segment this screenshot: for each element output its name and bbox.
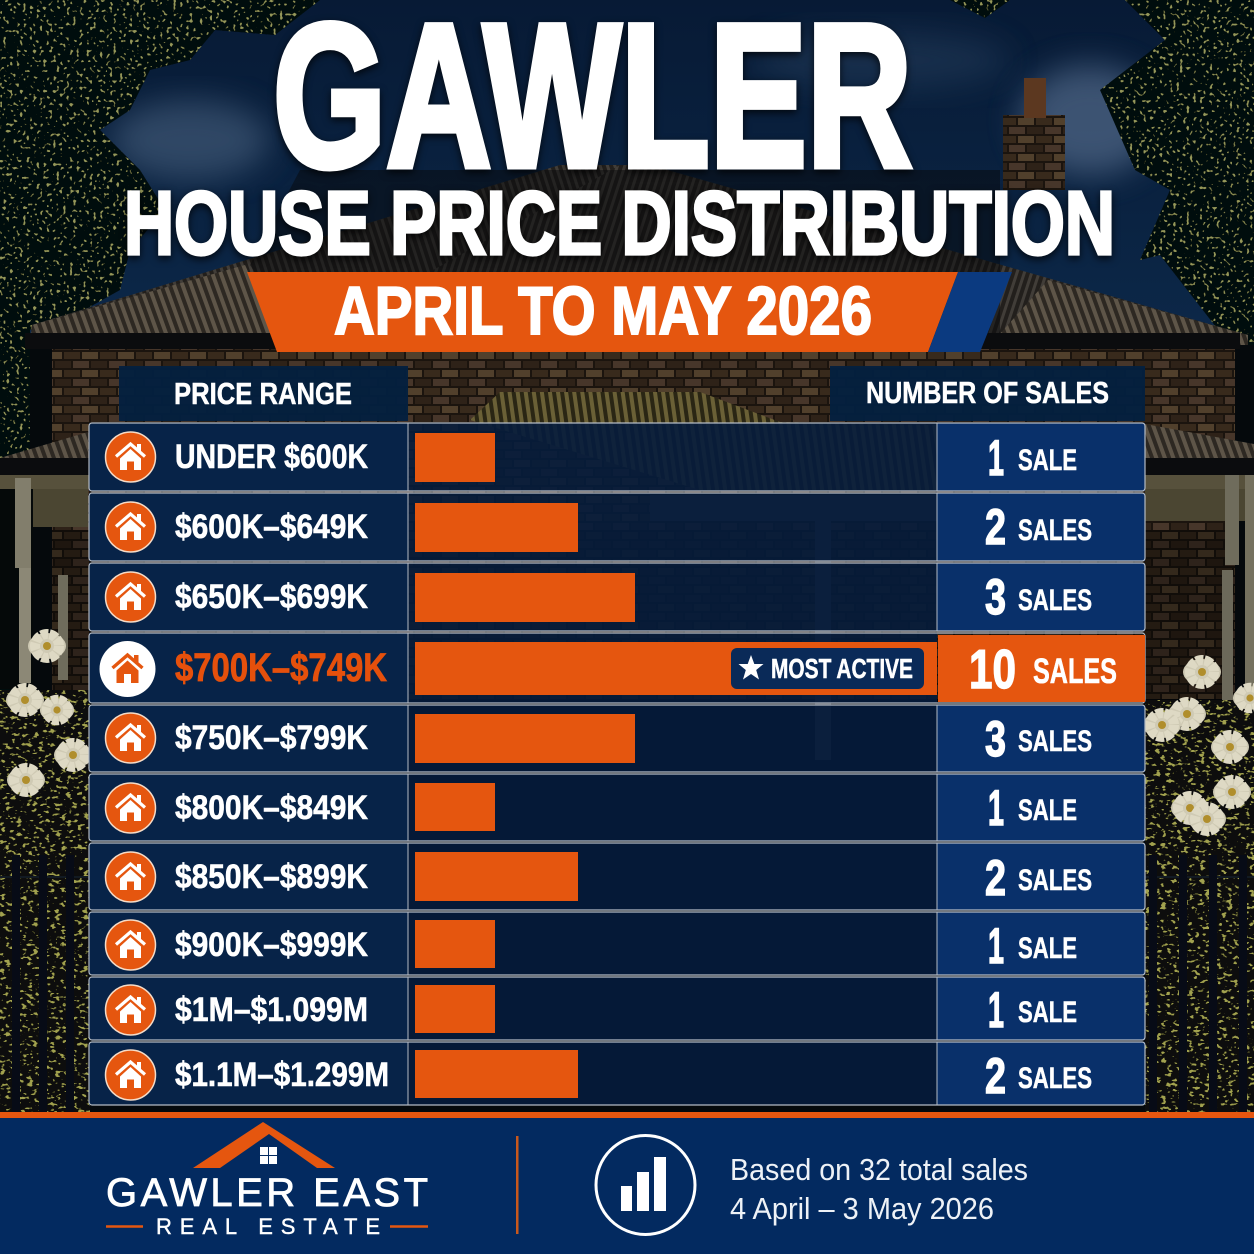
- row: under $600K: UNDER $600K: [175, 438, 368, 476]
- row: under $600K: SALE: [1018, 444, 1077, 477]
- row: $1.1M-$1.299M: 2: [985, 1048, 1006, 1104]
- row: $750K-$799K: [89, 705, 1145, 772]
- row: $600K-$649K: 2: [985, 499, 1006, 555]
- row: $900K-$999K: SALE: [1018, 932, 1077, 965]
- footer band: [0, 1112, 1254, 1254]
- row: $800K-$849K: $800K–$849K: [175, 789, 368, 827]
- row: $750K-$799K: $750K–$799K: [175, 719, 368, 757]
- footnote: total sales and date range: Based on 32 total sales: [730, 1152, 1028, 1187]
- row: $1M-$1.099M: 1: [988, 982, 1004, 1038]
- row: $1.1M-$1.299M: $1.1M–$1.299M: [175, 1056, 389, 1094]
- row: $900K-$999K: [89, 912, 1145, 975]
- garden bushes and fence: [0, 690, 1254, 1112]
- left and right trees: [0, 0, 1254, 700]
- row: $650K-$699K: $650K–$699K: [175, 578, 368, 616]
- row: under $600K: 1: [988, 430, 1004, 486]
- row: $700K-$749K most active highlight: $700K–$749K: [175, 646, 387, 690]
- row: $1M-$1.099M: [89, 977, 1145, 1040]
- row: $600K-$649K: $600K–$649K: [175, 508, 368, 546]
- column header: number of sales: [830, 366, 1145, 421]
- row: $1.1M-$1.299M: SALES: [1018, 1062, 1092, 1095]
- row: $600K-$649K: [89, 493, 1145, 561]
- row: $750K-$799K: 3: [985, 711, 1006, 767]
- row: $650K-$699K: 3: [985, 569, 1006, 625]
- row: $900K-$999K: $900K–$999K: [175, 926, 368, 964]
- row: $800K-$849K: [89, 774, 1145, 841]
- logo: Gawler East Real Estate: GAWLER EAST: [106, 1171, 428, 1215]
- row: $800K-$849K: SALE: [1018, 794, 1077, 827]
- row: $650K-$699K: [89, 563, 1145, 631]
- row: $600K-$649K: SALES: [1018, 514, 1092, 547]
- row: $850K-$899K: $850K–$899K: [175, 858, 368, 896]
- logo: Gawler East Real Estate: REAL ESTATE: [156, 1214, 380, 1239]
- row: $650K-$699K: SALES: [1018, 584, 1092, 617]
- row: $850K-$899K: [89, 843, 1145, 910]
- row: $700K-$749K most active highlight: [89, 633, 1145, 703]
- veranda roofs: [0, 424, 1254, 458]
- row: $700K-$749K most active highlight: 10: [969, 638, 1016, 700]
- icon: bar chart in circle: [596, 1136, 695, 1234]
- row: $1.1M-$1.299M: [89, 1042, 1145, 1105]
- row: $850K-$899K: SALES: [1018, 864, 1092, 897]
- column header: price range: PRICE RANGE: [174, 376, 352, 411]
- row: $700K-$749K most active highlight: SALES: [1033, 652, 1117, 691]
- logo: Gawler East Real Estate: [106, 1122, 428, 1239]
- row: $800K-$849K: 1: [988, 780, 1004, 836]
- row: $750K-$799K: SALES: [1018, 725, 1092, 758]
- most active badge: MOST ACTIVE: [771, 653, 913, 684]
- column header: number of sales: NUMBER OF SALES: [866, 375, 1109, 410]
- row: $900K-$999K: 1: [988, 918, 1004, 974]
- most active badge: [731, 648, 924, 689]
- row: $1M-$1.099M: $1M–$1.099M: [175, 991, 368, 1029]
- row: under $600K: [89, 423, 1145, 491]
- mid-table ghost veranda: [470, 392, 940, 490]
- footnote: total sales and date range: 4 April – 3 May 2026: [730, 1191, 994, 1226]
- column header: price range: [119, 366, 408, 421]
- row: $1M-$1.099M: SALE: [1018, 996, 1077, 1029]
- row: $850K-$899K: 2: [985, 850, 1006, 906]
- date banner: APRIL TO MAY 2026: [334, 273, 872, 349]
- footnote: total sales and date range: [730, 1152, 1028, 1226]
